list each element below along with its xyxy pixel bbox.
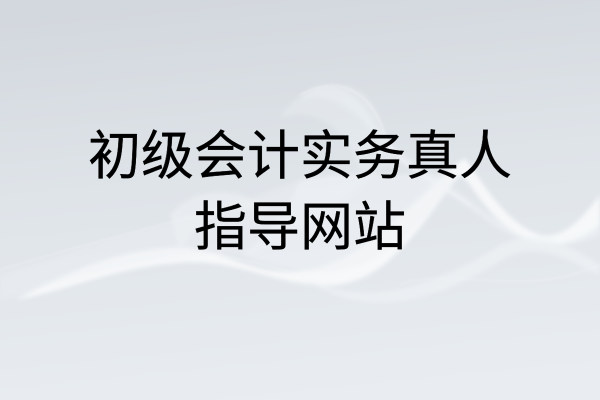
title: 初级会计实务真人 [88, 127, 512, 186]
title: 指导网站 [194, 198, 406, 257]
title [88, 127, 512, 257]
